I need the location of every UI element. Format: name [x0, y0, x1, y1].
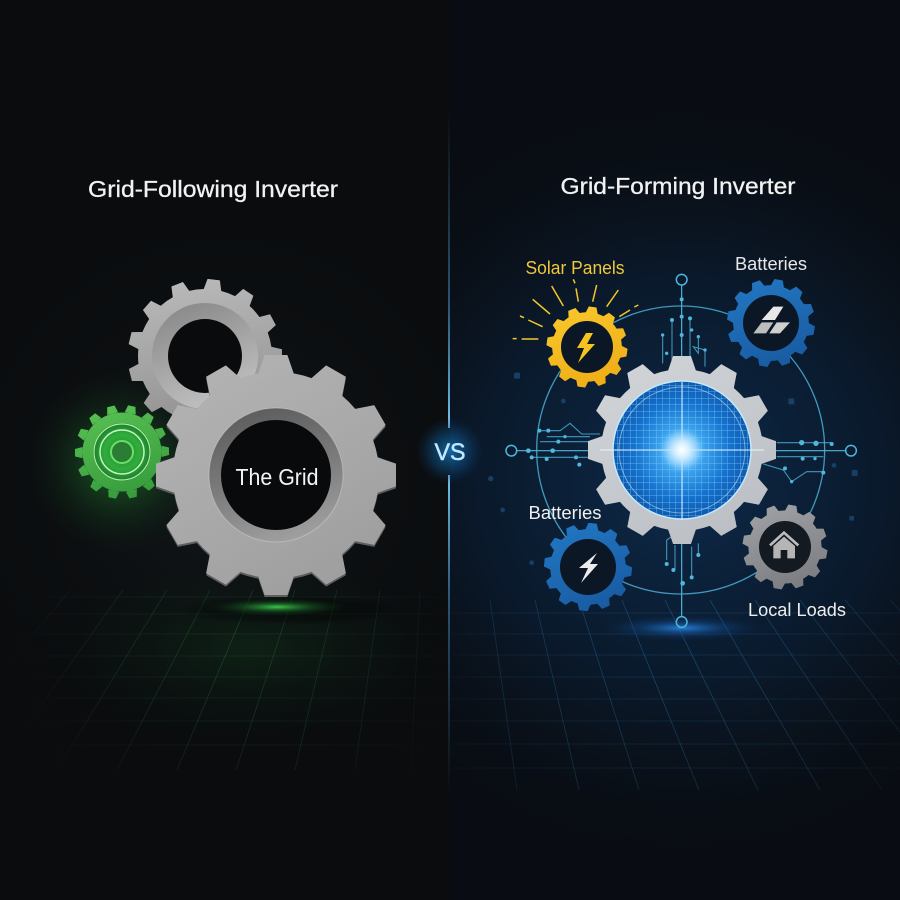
- label: the grid: The Grid: [236, 464, 318, 490]
- gear: back gray gear: [128, 278, 282, 414]
- label: batteries bottom: Batteries: [528, 503, 602, 523]
- title: grid-following inverter: Grid-Following Inverter: [88, 176, 338, 202]
- gear: central light-gray forming gear: [588, 356, 776, 544]
- gear: top-right blue batteries gear: [727, 279, 815, 367]
- right floor grid: [451, 600, 900, 790]
- background: left panel: [0, 0, 450, 900]
- gear: large gray grid gear: [156, 355, 396, 597]
- background: right panel: [450, 0, 900, 900]
- label: local loads: Local Loads: [748, 599, 846, 620]
- icon: white lightning bolt: [579, 553, 598, 583]
- left floor green tint: [50, 560, 450, 740]
- label: batteries top: Batteries: [735, 254, 807, 274]
- green glow behind small gear: [26, 370, 210, 554]
- icon: house: [770, 533, 798, 558]
- title: grid-forming inverter: Grid-Forming Inverter: [560, 173, 796, 199]
- icon: solar lightning bolt: [577, 333, 595, 363]
- gear: bottom-left blue batteries gear: [544, 522, 632, 612]
- label: solar panels: Solar Panels: [526, 258, 624, 278]
- left floor grid: [33, 590, 420, 770]
- right panel blue glow: [450, 100, 900, 860]
- gear: local loads gray gear: [742, 504, 828, 590]
- divider line: upper: [448, 110, 450, 428]
- gear: green follower gear: [74, 405, 170, 499]
- floor glow under the grid gear: [205, 598, 349, 616]
- left panel ambient light: [0, 100, 450, 800]
- VS badge: VS: [434, 439, 466, 466]
- central glowing orb with grid: [600, 381, 764, 520]
- network: orbit ring, axes and circuit traces: [488, 274, 858, 627]
- floor shadow under the grid gear: [175, 595, 405, 625]
- floor glow under the central gear: [597, 615, 767, 641]
- divider line: lower: [448, 475, 450, 795]
- icon: panel tiles: [753, 307, 790, 333]
- solar rays: [513, 279, 638, 339]
- gear: solar panels yellow gear: [546, 306, 628, 388]
- VS badge: [416, 417, 484, 485]
